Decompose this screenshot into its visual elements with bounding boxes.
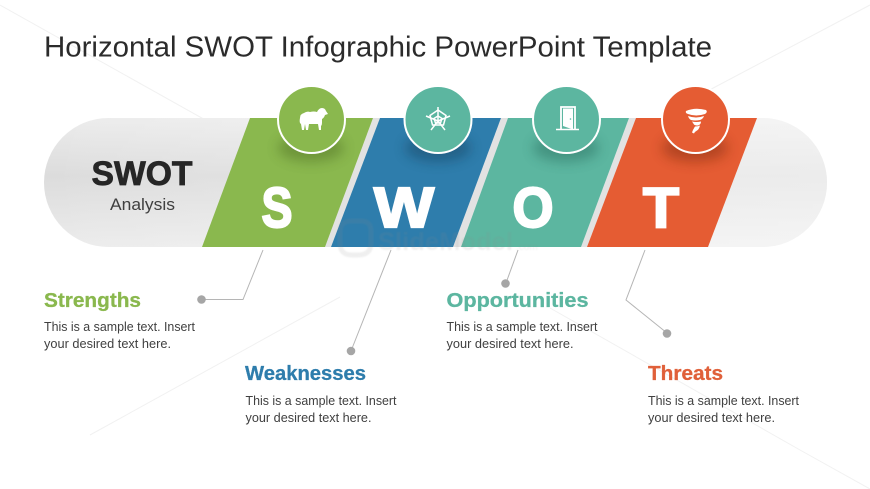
connector: Opportunities bbox=[501, 250, 518, 288]
heading: SWOT Analysis: Analysis bbox=[110, 195, 175, 214]
title: Horizontal SWOT Infographic PowerPoint Template bbox=[44, 32, 712, 64]
icon circle: tornado bbox=[662, 86, 729, 153]
text block: Weaknesses: This is a sample text. Insert bbox=[246, 394, 397, 408]
icon circle: door bbox=[533, 86, 600, 153]
panel: Threats band bbox=[587, 118, 757, 247]
heading: SWOT Analysis: SWOT bbox=[92, 155, 193, 193]
watermark: .com bbox=[516, 242, 538, 253]
icon: sheep bbox=[300, 108, 328, 130]
icon circle: sheep bbox=[278, 86, 345, 153]
text block: Strengths: Strengths bbox=[44, 290, 141, 312]
heading: SWOT Analysis bbox=[92, 155, 193, 214]
watermark bbox=[340, 221, 538, 256]
watermark: SlideModel bbox=[378, 228, 513, 256]
icon: web bbox=[426, 107, 450, 130]
letter O: O bbox=[512, 176, 554, 240]
text block: Weaknesses bbox=[245, 363, 397, 425]
panel: SWOT pill band bbox=[44, 118, 827, 247]
panel: Strengths band bbox=[202, 118, 373, 247]
text block: Strengths: This is a sample text. Insert bbox=[44, 320, 196, 334]
icon: tornado bbox=[686, 109, 707, 134]
letter W: W bbox=[374, 176, 434, 240]
text block: Threats bbox=[648, 363, 800, 425]
letter T: T bbox=[643, 176, 679, 240]
icon circle: spider web bbox=[404, 86, 472, 153]
panel: Weaknesses band bbox=[331, 118, 501, 247]
text block: Opportunities bbox=[446, 290, 598, 351]
connector: Weaknesses bbox=[347, 250, 391, 355]
connector: Threats bbox=[626, 250, 671, 338]
text block: Opportunities: Opportunities bbox=[446, 290, 588, 312]
text block: Threats: Threats bbox=[648, 363, 723, 385]
text block: Strengths: your desired text here. bbox=[44, 337, 171, 351]
text block: Threats: your desired text here. bbox=[648, 411, 775, 425]
text block: Threats: This is a sample text. Insert bbox=[648, 394, 800, 408]
panel: Opportunities band bbox=[461, 118, 629, 247]
letter S: S bbox=[262, 176, 292, 240]
text block: Weaknesses: your desired text here. bbox=[246, 411, 372, 425]
connector: Strengths bbox=[197, 250, 263, 304]
text block: Opportunities: your desired text here. bbox=[446, 337, 574, 351]
text block: Weaknesses: Weaknesses bbox=[245, 363, 366, 385]
separator shadows bbox=[325, 118, 636, 247]
text block: Opportunities: This is a sample text. Insert bbox=[446, 320, 598, 334]
text block: Strengths bbox=[44, 290, 196, 351]
icon: door bbox=[556, 107, 579, 130]
